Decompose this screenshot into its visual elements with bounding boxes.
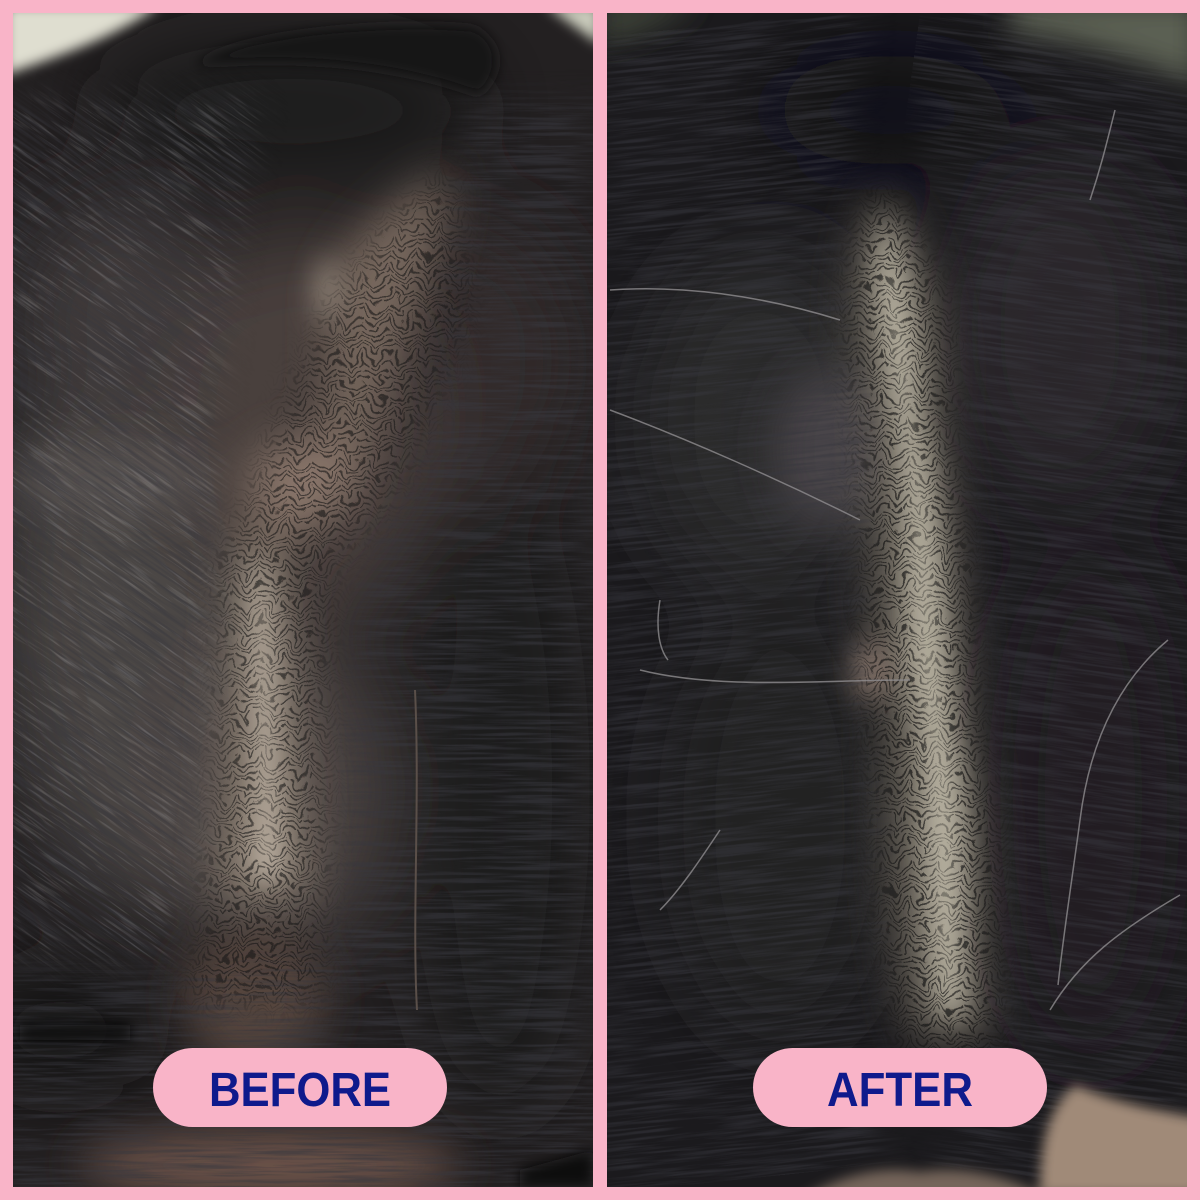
after label: AFTER — [827, 1064, 973, 1117]
before label: BEFORE — [209, 1064, 391, 1117]
before: background corners — [5, 5, 600, 75]
after: skin at lower right — [808, 1078, 1187, 1187]
panel: before photo — [13, 13, 593, 1187]
after label — [753, 1048, 1047, 1127]
after: stray grey hairs — [610, 110, 1180, 1010]
before: hair texture — [13, 89, 262, 970]
panel: after photo — [607, 13, 1187, 1187]
after: background corners — [600, 0, 1200, 85]
after: scalp part — [775, 190, 990, 1040]
after: hair texture — [607, 15, 885, 1186]
before label — [153, 1048, 447, 1127]
before: scalp part — [10, 170, 460, 1199]
